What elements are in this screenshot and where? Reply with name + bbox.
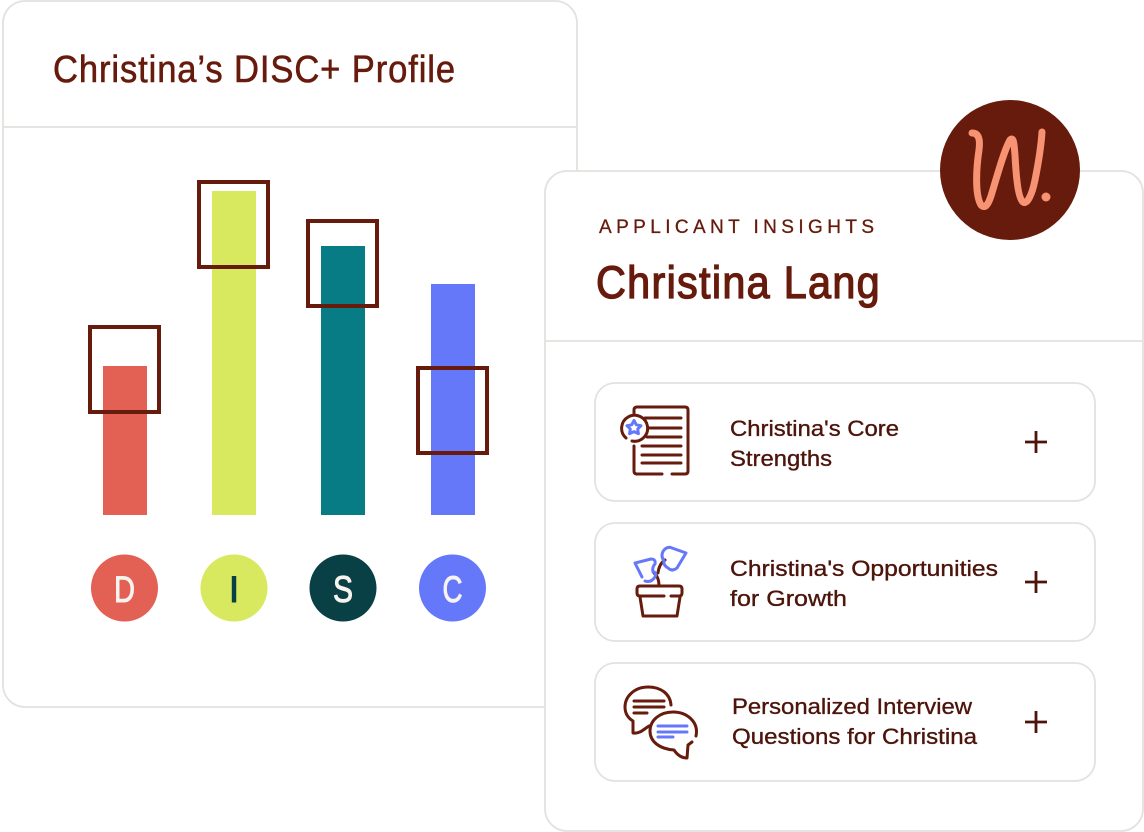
applicant name: Christina Lang xyxy=(596,257,881,308)
badge: C xyxy=(419,554,486,622)
badge: S: S xyxy=(333,569,353,610)
bar: I xyxy=(212,191,256,515)
row label: Christina's Opportunities xyxy=(730,556,998,581)
accordion row: core strengths xyxy=(595,383,1095,501)
accordion row: opportunities for growth xyxy=(595,523,1095,641)
logo: W badge xyxy=(940,100,1080,240)
badge: D xyxy=(91,554,158,622)
badge: I xyxy=(200,554,268,622)
icon: plus xyxy=(1025,711,1047,733)
icon: potted plant xyxy=(635,547,686,616)
bar: D xyxy=(103,366,147,515)
accordion row: interview questions xyxy=(595,663,1095,781)
heading: profile title: Christina’s DISC+ Profile xyxy=(53,49,456,91)
badge: I: I xyxy=(229,569,239,610)
badge: S xyxy=(310,554,376,622)
marker: D range xyxy=(90,327,159,412)
marker: I range xyxy=(199,182,268,267)
row label: Christina's Core xyxy=(730,416,899,441)
badge: D: D xyxy=(114,569,135,610)
row label: for Growth xyxy=(730,586,847,611)
icon: plus xyxy=(1025,431,1047,453)
bar: C xyxy=(431,284,475,515)
panel: applicant insights card xyxy=(545,171,1143,831)
bar: S xyxy=(321,246,365,515)
eyebrow label: APPLICANT INSIGHTS xyxy=(599,217,874,238)
panel: DISC profile card xyxy=(3,1,577,707)
marker: S range xyxy=(308,221,377,306)
row label: Strengths xyxy=(730,446,832,471)
icon: speech bubbles xyxy=(625,687,696,758)
icon: resume with star xyxy=(622,407,688,474)
row label: Personalized Interview xyxy=(732,694,972,719)
marker: C range xyxy=(418,368,487,453)
icon: plus xyxy=(1025,571,1047,593)
row label: Questions for Christina xyxy=(732,724,978,749)
badge: C: C xyxy=(442,569,462,610)
bar chart: DISC scores xyxy=(90,182,487,515)
